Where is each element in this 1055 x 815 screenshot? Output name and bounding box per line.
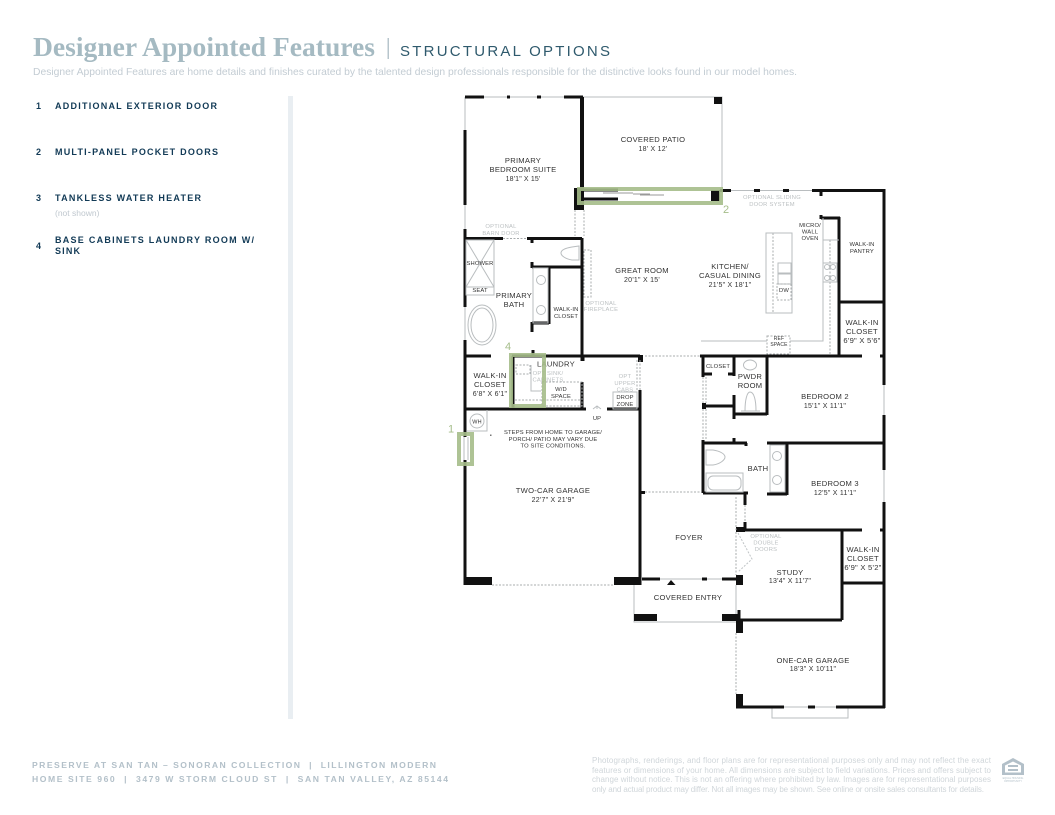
- room labels: PORCH/ PATIO MAY VARY DUE: [509, 437, 597, 443]
- feature list: 3: [36, 193, 41, 203]
- optional labels: OPT: [619, 374, 632, 380]
- room labels: 18' X 12': [638, 146, 668, 153]
- exterior walls: [465, 97, 885, 708]
- optional labels: BARN DOOR: [482, 231, 520, 237]
- feature list: 2: [36, 147, 41, 157]
- optional labels: OPTIONAL: [485, 224, 517, 230]
- room labels: CLOSET: [847, 554, 879, 563]
- footer disclaimer: only and actual product may differ. Not all images may be shown. See online or onsite sales consultants for details.: [592, 785, 984, 794]
- room labels: OVEN: [801, 236, 819, 242]
- room labels: TWO-CAR GARAGE: [516, 486, 590, 495]
- room labels: BEDROOM 3: [811, 479, 859, 488]
- water heater: [467, 410, 492, 436]
- fireplace: [584, 250, 591, 297]
- room labels: SPACE: [551, 394, 571, 400]
- room labels: MICRO/: [799, 223, 821, 229]
- room labels: ROOM: [738, 381, 762, 390]
- room labels: ONE-CAR GARAGE: [776, 656, 850, 665]
- room labels: TO SITE CONDITIONS.: [521, 444, 586, 450]
- room labels: CASUAL DINING: [699, 271, 761, 280]
- room labels: WALK-IN: [850, 242, 874, 248]
- vertical divider: [288, 96, 293, 719]
- room labels: COVERED PATIO: [621, 135, 685, 144]
- room labels: 6'8" X 6'1": [473, 391, 508, 398]
- garage and entry blocks: [465, 577, 740, 621]
- up arrow: [593, 406, 601, 422]
- room labels: KITCHEN/: [711, 262, 749, 271]
- room labels: W/D: [555, 387, 567, 393]
- dashed optional elements: [492, 210, 830, 694]
- room labels: WALL: [802, 230, 819, 236]
- room labels: 12'5" X 11'1": [814, 490, 856, 497]
- title: Designer Appointed Features: [33, 32, 375, 62]
- room labels: 18'3" X 10'11": [790, 666, 836, 673]
- feature list: ADDITIONAL EXTERIOR DOOR: [55, 101, 218, 111]
- optional labels: OPT SINK/: [533, 371, 564, 377]
- laundry fixtures: [516, 365, 637, 409]
- room labels: BATH: [504, 300, 524, 309]
- room labels: 18'1" X 15': [506, 176, 540, 183]
- footer address: PRESERVE AT SAN TAN – SONORAN COLLECTION | LILLINGTON MODERN: [32, 760, 436, 770]
- room labels: 6'9" X 5'6": [843, 336, 881, 345]
- optional labels: FIREPLACE: [584, 307, 618, 313]
- optional labels: CABINETS: [532, 378, 564, 384]
- room labels: WALK-IN: [554, 307, 578, 313]
- optional labels: DOUBLE: [753, 540, 779, 546]
- up arrow: UP: [593, 416, 601, 422]
- room labels: CLOSET: [554, 314, 578, 320]
- room labels: 15'1" X 11'1": [804, 403, 846, 410]
- footer disclaimer: [592, 756, 992, 794]
- icon: equal housing: OPPORTUNITY: [1004, 780, 1022, 783]
- tub: [468, 305, 496, 345]
- optional labels: [482, 195, 801, 553]
- hall bath fixtures: [706, 445, 785, 492]
- icon: equal housing: EQUAL HOUSING: [1003, 777, 1023, 780]
- room labels: LAUNDRY: [537, 360, 575, 368]
- room labels: DW: [779, 288, 789, 294]
- entry triangle: [667, 580, 676, 585]
- feature list: SINK: [55, 246, 80, 256]
- kitchen and pantry walls: [700, 217, 884, 356]
- footer address: [32, 760, 448, 784]
- sliding door jamb walls: [574, 188, 840, 219]
- powder room fixtures: [741, 360, 760, 411]
- bedroom and bath walls: [703, 438, 884, 531]
- feature list: 4: [36, 241, 41, 251]
- room labels: [466, 135, 882, 673]
- room labels: DROP: [616, 395, 634, 401]
- highlight 4: base cabinets laundry: [505, 341, 544, 406]
- feature list: TANKLESS WATER HEATER: [55, 193, 202, 203]
- footer disclaimer: Photographs, renderings, and floor plans are for representational purposes only and may not reflect the exact: [592, 756, 992, 765]
- subtitle: Designer Appointed Features are home details and finishes curated by the talented design professionals responsible for the distinctive looks found in our model homes.: [33, 66, 797, 78]
- highlight 1: additional exterior door: [448, 424, 472, 464]
- room labels: CLOSET: [474, 380, 506, 389]
- room labels: WALK-IN: [846, 545, 880, 554]
- room labels: 13'4" X 11'7": [769, 578, 811, 585]
- laundry and closet walls: [465, 350, 640, 409]
- title: STRUCTURAL OPTIONS: [400, 43, 610, 60]
- room labels: CLOSET: [706, 364, 730, 370]
- optional labels: CABS: [617, 388, 633, 394]
- floor plan: [464, 97, 885, 718]
- footer disclaimer: features or dimensions of your home. All dimensions are subject to field variations. Prices and offers subject to: [592, 766, 992, 775]
- room labels: SEAT: [472, 288, 488, 294]
- room labels: SHOWER: [466, 261, 494, 267]
- room labels: 20'1" X 15': [624, 277, 660, 284]
- title: [33, 32, 610, 62]
- feature list: MULTI-PANEL POCKET DOORS: [55, 147, 218, 157]
- room labels: PANTRY: [850, 249, 874, 255]
- room labels: STUDY: [776, 568, 804, 577]
- room labels: BATH: [748, 464, 768, 473]
- footer address: HOME SITE 960 | 3479 W STORM CLOUD ST | SAN TAN VALLEY, AZ 85144: [32, 774, 448, 784]
- room labels: ZONE: [617, 402, 633, 408]
- study and one-car garage walls: [739, 531, 884, 620]
- room labels: BEDROOM 2: [801, 392, 849, 401]
- room labels: 6'9" X 5'2": [844, 563, 882, 572]
- feature list: BASE CABINETS LAUNDRY ROOM W/: [55, 235, 254, 245]
- windows and light walls: [464, 97, 884, 718]
- feature list: 1: [36, 101, 41, 111]
- primary vanity and toilet: [533, 246, 579, 323]
- highlight 2: multi-panel pocket doors: [579, 189, 729, 216]
- highlight 4: base cabinets laundry: 4: [505, 341, 511, 353]
- room labels: 22'7" X 21'9": [532, 497, 575, 504]
- room labels: PRIMARY: [496, 291, 532, 300]
- room labels: CLOSET: [846, 327, 878, 336]
- optional labels: OPTIONAL SLIDING: [743, 195, 801, 201]
- optional labels: DOORS: [755, 547, 777, 553]
- room labels: WALK-IN: [845, 318, 879, 327]
- shower and seat: [466, 240, 494, 295]
- water heater: WH: [472, 420, 482, 426]
- icon: equal housing: [1002, 758, 1024, 783]
- room labels: GREAT ROOM: [615, 266, 669, 275]
- optional labels: DOOR SYSTEM: [749, 202, 795, 208]
- powder and closet walls: [703, 356, 767, 419]
- room labels: STEPS FROM HOME TO GARAGE/: [504, 430, 602, 436]
- kitchen counters: [701, 218, 839, 354]
- optional labels: OPTIONAL: [585, 301, 617, 307]
- room labels: COVERED ENTRY: [654, 593, 722, 602]
- feature list: [36, 101, 254, 256]
- primary suite walls: [465, 238, 582, 361]
- footer disclaimer: change without notice. This is not an offering where prohibited by law. Images are for representational purposes: [592, 775, 991, 784]
- study double doors: [738, 533, 752, 572]
- room labels: BEDROOM SUITE: [490, 165, 556, 174]
- kitchen island: [766, 233, 792, 313]
- room labels: 21'5" X 18'1": [709, 282, 752, 289]
- patio outline and posts: [583, 97, 722, 188]
- feature list: (not shown): [55, 208, 100, 218]
- highlight 2: multi-panel pocket doors: 2: [723, 204, 729, 216]
- room labels: REF: [774, 336, 784, 342]
- room labels: WALK-IN: [473, 371, 507, 380]
- room labels: FOYER: [675, 533, 703, 542]
- room labels: SPACE: [770, 342, 788, 348]
- room labels: PWDR: [738, 372, 762, 381]
- room labels: PRIMARY: [505, 156, 541, 165]
- optional labels: UPPER: [614, 381, 636, 387]
- highlight 1: additional exterior door: 1: [448, 424, 454, 436]
- optional labels: OPTIONAL: [750, 534, 782, 540]
